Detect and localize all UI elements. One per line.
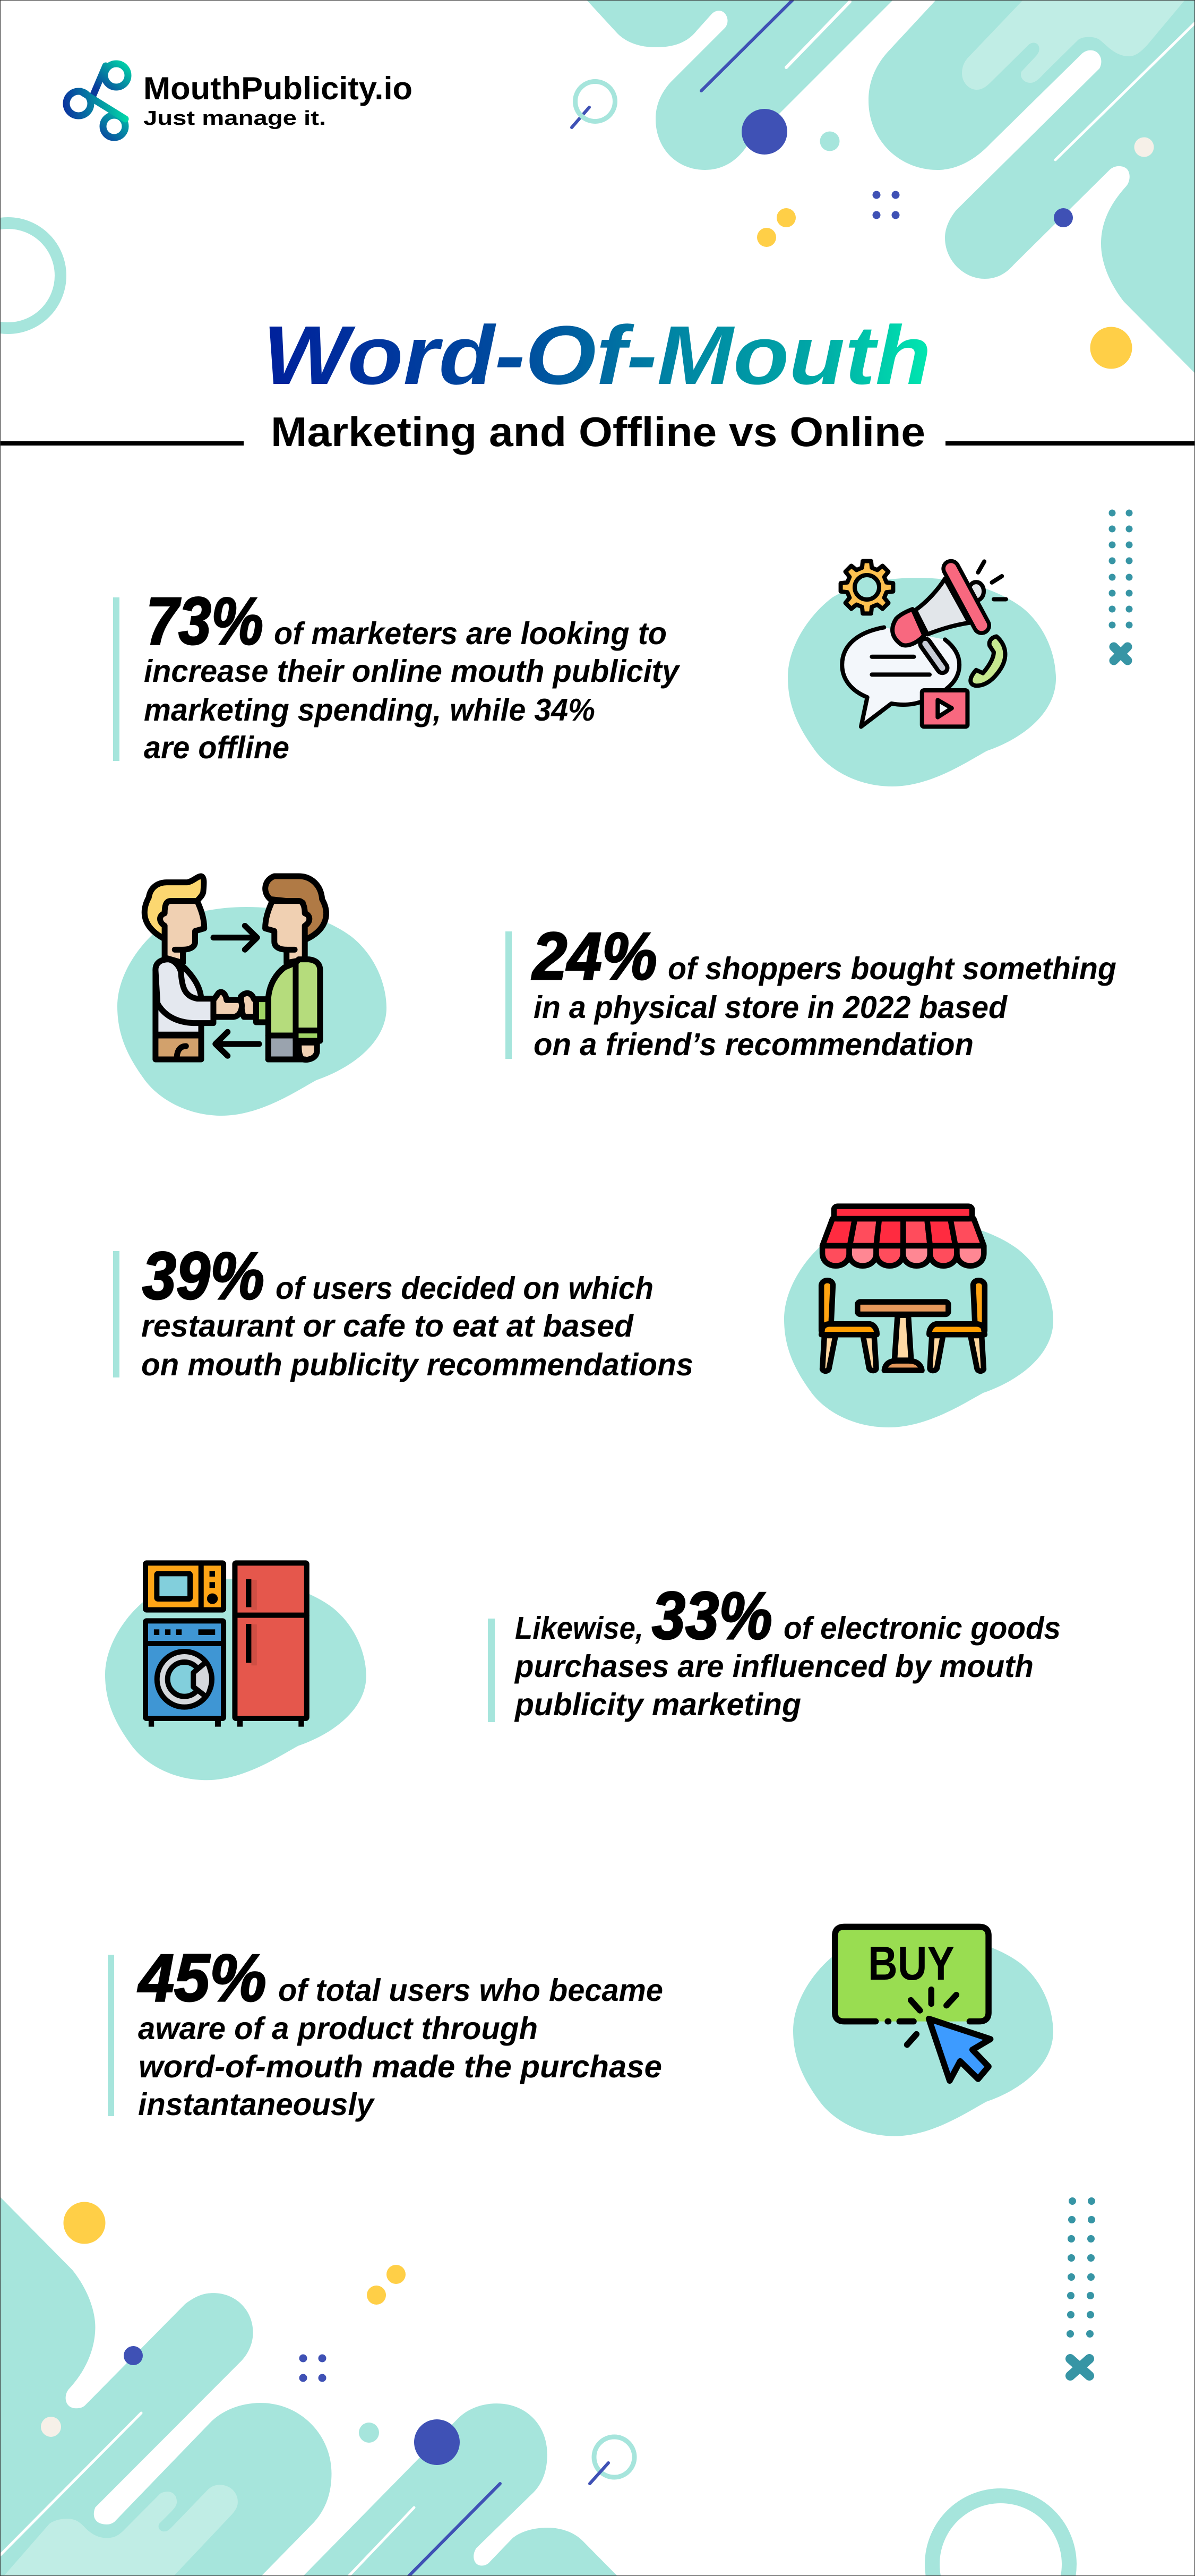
stat text	[144, 616, 681, 765]
stat text: increase their online mouth publicity	[144, 654, 681, 689]
logo tagline: Just manage it.	[143, 107, 326, 130]
stat text	[141, 1271, 693, 1382]
button and cursor	[835, 1927, 991, 2081]
stat text: of users decided on which	[276, 1271, 654, 1306]
stat text: are offline	[144, 730, 289, 765]
top decoration	[0, 0, 1195, 373]
bottom accent lines	[0, 2413, 500, 2576]
accent bar	[113, 1251, 119, 1377]
stat lead-in: Likewise,	[515, 1611, 643, 1646]
blob	[788, 578, 1056, 786]
awning and furniture	[821, 1206, 985, 1371]
icon: cafe table with awning	[784, 1206, 1053, 1427]
bottom blobs	[0, 2197, 617, 2576]
logo mark	[66, 64, 128, 138]
megaphone, bubble, phone and play button	[842, 561, 1006, 726]
stat text: of total users who became	[278, 1973, 663, 2008]
title: Word-Of-Mouth	[263, 309, 931, 402]
button label: BUY	[868, 1937, 955, 1990]
big number: 33%	[652, 1578, 772, 1653]
panel: stat 73%	[113, 584, 681, 765]
top circles	[0, 82, 1154, 369]
stat text: purchases are influenced by mouth	[514, 1649, 1034, 1684]
icon: buy button with cursor	[793, 1927, 1053, 2136]
appliances	[145, 1563, 307, 1727]
blob	[784, 1220, 1053, 1427]
stat text: word-of-mouth made the purchase	[139, 2049, 662, 2084]
stat text: of shoppers bought something	[668, 951, 1116, 986]
top teal blob right	[869, 0, 1195, 373]
panel: stat 33%	[488, 1578, 1061, 1722]
dots and cross top right	[1108, 510, 1133, 661]
dots and cross bottom right	[1067, 2197, 1095, 2376]
stat text: restaurant or cafe to eat at based	[141, 1308, 634, 1343]
subtitle with rules	[0, 408, 1195, 455]
big number: 45%	[137, 1940, 266, 2015]
big number: 24%	[531, 919, 657, 994]
icon: two people shaking hands	[117, 876, 386, 1116]
icon: microwave, washer and fridge	[105, 1563, 366, 1780]
accent bar	[113, 597, 119, 761]
accent bar	[488, 1619, 495, 1722]
big number: 39%	[142, 1238, 264, 1313]
blob	[117, 907, 386, 1116]
stat text: instantaneously	[138, 2087, 375, 2122]
icon: megaphone marketing	[788, 561, 1056, 786]
gear	[841, 561, 893, 613]
top teal blob left	[587, 0, 893, 170]
blob	[105, 1579, 366, 1780]
panel: stat 24%	[505, 919, 1116, 1062]
stat text: aware of a product through	[138, 2011, 538, 2046]
logo	[66, 64, 412, 138]
accent bar	[108, 1955, 114, 2116]
blob	[793, 1935, 1053, 2136]
stat text: publicity marketing	[514, 1687, 801, 1722]
stat text: on mouth publicity recommendations	[141, 1347, 693, 1382]
stat text	[534, 951, 1116, 1062]
top light blob	[962, 0, 1185, 90]
bottom circles	[41, 2202, 1069, 2576]
stat text: of electronic goods	[784, 1611, 1061, 1646]
bottom decoration	[0, 2197, 1069, 2576]
stat text: marketing spending, while 34%	[144, 692, 595, 728]
subtitle with rules: Marketing and Offline vs Online	[271, 408, 925, 455]
stat text: in a physical store in 2022 based	[534, 990, 1008, 1025]
stat text	[138, 1973, 663, 2122]
top accent lines	[572, 0, 1195, 160]
stat text: on a friend’s recommendation	[534, 1027, 974, 1062]
stat text	[514, 1611, 1061, 1722]
panel: stat 45%	[108, 1940, 663, 2122]
people	[144, 876, 326, 1059]
big number: 73%	[146, 584, 263, 658]
logo name: MouthPublicity.io	[143, 71, 412, 106]
accent bar	[505, 931, 512, 1059]
stat text: of marketers are looking to	[274, 616, 667, 651]
panel: stat 39%	[113, 1238, 693, 1382]
